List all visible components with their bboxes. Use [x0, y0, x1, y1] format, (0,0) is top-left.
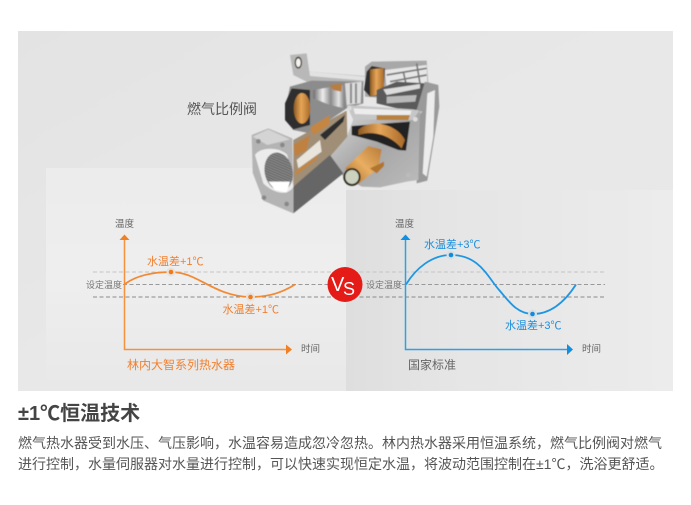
- VS badge: V: [331, 274, 345, 296]
- chart title: 国家标准: [408, 357, 456, 372]
- chart: Rinnai temperature curve: [86, 218, 320, 372]
- axis arrow up: [120, 234, 130, 240]
- y axis label: 温度: [115, 218, 135, 230]
- peak label: 水温差+3℃: [424, 237, 481, 251]
- panel background: [18, 31, 673, 391]
- right shaded area: [346, 190, 673, 391]
- VS badge: S: [343, 279, 355, 299]
- body text: [18, 435, 663, 472]
- trough marker: [528, 310, 537, 318]
- peak label: 水温差+1℃: [147, 254, 204, 268]
- set temperature label: 设定温度: [86, 279, 122, 290]
- x axis label: 时间: [582, 343, 601, 355]
- set temperature label: 设定温度: [366, 279, 402, 290]
- peak marker: [166, 268, 176, 276]
- axes: [124, 238, 288, 350]
- icon: gas proportional valve: [252, 53, 439, 213]
- y axis label: 温度: [395, 218, 415, 230]
- valve label: 燃气比例阀: [187, 101, 257, 117]
- heading: ±1℃恒温技术: [18, 403, 140, 425]
- peak marker: [446, 250, 456, 260]
- body text: 进行控制，水量伺服器对水量进行控制，可以快速实现恒定水温，将波动范围控制在±1℃，洗浴更舒适。: [18, 456, 663, 472]
- left light area: [46, 168, 346, 391]
- axis arrow up: [400, 234, 410, 240]
- axis arrow right: [286, 344, 292, 354]
- body text: 燃气热水器受到水压、气压影响，水温容易造成忽冷忽热。林内热水器采用恒温系统，燃气比例阀对燃气: [18, 435, 662, 451]
- divider dashed lines: [93, 272, 605, 297]
- trough label: 水温差+1℃: [222, 302, 279, 316]
- axis arrow right: [567, 344, 573, 355]
- chart title: 林内大智系列热水器: [127, 357, 235, 372]
- chart: national standard temperature curve: [366, 218, 601, 372]
- axes: [406, 240, 570, 350]
- x axis label: 时间: [301, 343, 320, 355]
- VS badge: [328, 267, 362, 302]
- trough label: 水温差+3℃: [505, 318, 562, 332]
- trough marker: [246, 292, 255, 302]
- temperature curve: [124, 272, 295, 297]
- temperature curve: [406, 255, 576, 314]
